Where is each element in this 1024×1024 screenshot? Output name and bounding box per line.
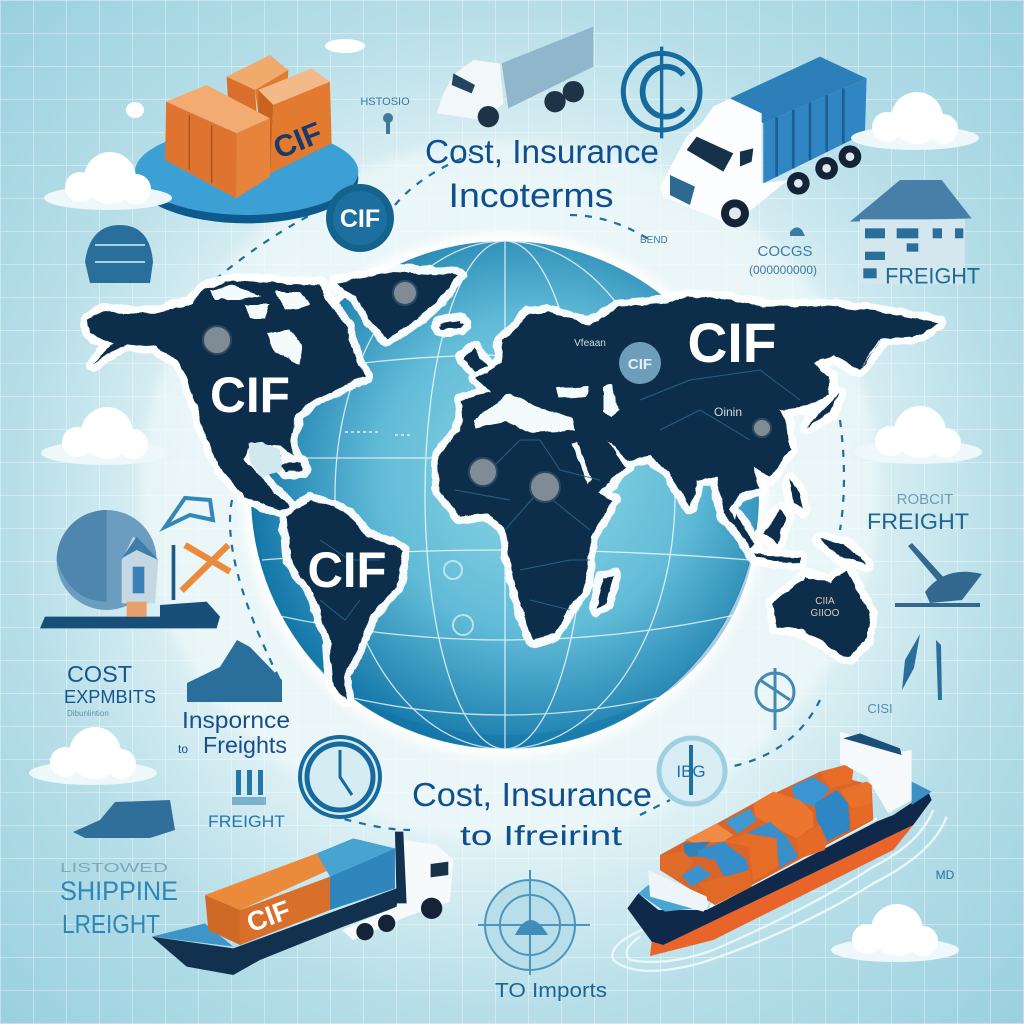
insurance freights label: Freights <box>203 732 287 758</box>
house freight <box>850 180 980 288</box>
waves <box>612 810 947 971</box>
insurance freights label: Inspornce <box>182 707 290 733</box>
left house scene <box>40 510 230 628</box>
deck rail <box>710 818 877 907</box>
title top: Incoterms <box>448 177 614 215</box>
containers <box>648 765 873 912</box>
orange containers <box>165 55 332 198</box>
CIF map labels: CIF <box>210 367 290 423</box>
icon: strokes lower right <box>902 634 942 700</box>
cost expenses label: Dibunlintion <box>67 709 109 718</box>
map small labels: Vfeaan <box>574 338 606 349</box>
CIF badge <box>326 184 394 252</box>
container ship <box>612 732 947 971</box>
dashed routes <box>160 155 844 830</box>
tiny label near title: BEND <box>640 235 668 246</box>
map borders <box>320 370 800 620</box>
cost expenses label <box>64 661 156 718</box>
icon: buildings <box>187 640 282 702</box>
shipping freight label: LISTOWED <box>60 860 168 875</box>
shipping freight label: LREIGHT <box>62 909 160 939</box>
continents <box>88 272 940 700</box>
CIF map labels <box>210 311 776 598</box>
label: robot freight <box>867 491 969 534</box>
insurance freights label <box>178 707 290 758</box>
mast <box>172 545 175 600</box>
freight small label: FREIGHT <box>208 812 285 831</box>
large truck top right <box>660 57 867 227</box>
insurance freights label: to <box>178 742 188 756</box>
CIF stack on platform <box>135 55 358 223</box>
label: cocog: (000000000) <box>749 263 817 277</box>
deck <box>638 885 710 912</box>
globe <box>243 233 767 757</box>
CIF map labels: CIF <box>308 542 386 598</box>
title bottom: to Ifreirint <box>460 820 622 851</box>
freight small label <box>208 770 285 831</box>
deck <box>152 923 233 947</box>
house freight: FREIGHT <box>885 263 980 288</box>
roof <box>122 537 158 560</box>
small label and keyhole: HSTOSIO <box>360 96 410 108</box>
clock <box>300 737 380 817</box>
cab <box>342 840 453 940</box>
CIF text: CIF <box>242 894 294 938</box>
hull <box>152 888 407 975</box>
platform truck <box>40 602 220 628</box>
house <box>122 537 158 603</box>
CIF box label: CIF <box>269 116 327 166</box>
map small labels <box>574 338 840 619</box>
badge bottom: IBG <box>676 762 706 781</box>
dome <box>57 510 157 610</box>
small truck top <box>437 27 593 127</box>
badge bottom <box>659 738 725 804</box>
title top <box>425 133 659 215</box>
bridge <box>840 732 912 813</box>
building icon upper left <box>85 225 153 283</box>
label: robot freight: ROBCIT <box>897 491 953 508</box>
map small labels: Oinin <box>714 405 742 419</box>
platform <box>135 128 358 223</box>
map small labels: CIIA <box>815 596 835 607</box>
map marker: CIF <box>628 356 652 373</box>
compass bottom <box>478 870 590 975</box>
ocean icons <box>345 432 473 635</box>
shipping freight label <box>60 860 178 939</box>
cost expenses label: EXPMBITS <box>64 687 156 707</box>
title bottom <box>412 776 652 851</box>
cab window <box>431 862 448 877</box>
hull <box>627 792 932 945</box>
ship silhouette left <box>73 800 175 838</box>
rear deck blue <box>912 782 932 805</box>
CIF map labels: CIF <box>688 311 776 374</box>
small label and keyhole <box>360 96 410 134</box>
pillar <box>395 832 407 903</box>
label: cocog <box>749 227 817 277</box>
containers <box>205 838 395 945</box>
icon: globe small right <box>756 668 794 730</box>
orange hull band <box>650 825 913 956</box>
title top: Cost, Insurance <box>425 133 659 170</box>
title bottom: Cost, Insurance <box>412 776 652 813</box>
label: cocog: COCGS <box>757 243 813 260</box>
icon: cannon ship silhouette right <box>895 543 982 607</box>
wheels <box>356 898 442 940</box>
world map <box>88 272 940 700</box>
icon: compass target <box>623 47 700 138</box>
bridge windows <box>843 733 902 755</box>
shipping freight label: SHIPPINE <box>60 876 178 906</box>
inland seas <box>210 285 618 484</box>
map halo <box>88 272 940 700</box>
bottom left cif truck ship <box>152 832 453 975</box>
small text lower right: CISI <box>867 701 893 716</box>
map small labels: GIIOO <box>811 608 840 619</box>
map markers small <box>203 281 771 502</box>
window <box>133 567 144 593</box>
imports label: TO Imports <box>495 980 607 1002</box>
map marker <box>619 342 661 384</box>
cost expenses label: COST <box>67 661 132 687</box>
icon: tent shape <box>165 498 213 527</box>
icon: small ship marker: MD <box>936 868 955 882</box>
orange cross <box>182 545 230 591</box>
CIF badge: CIF <box>340 205 380 233</box>
label: robot freight: FREIGHT <box>867 509 969 534</box>
